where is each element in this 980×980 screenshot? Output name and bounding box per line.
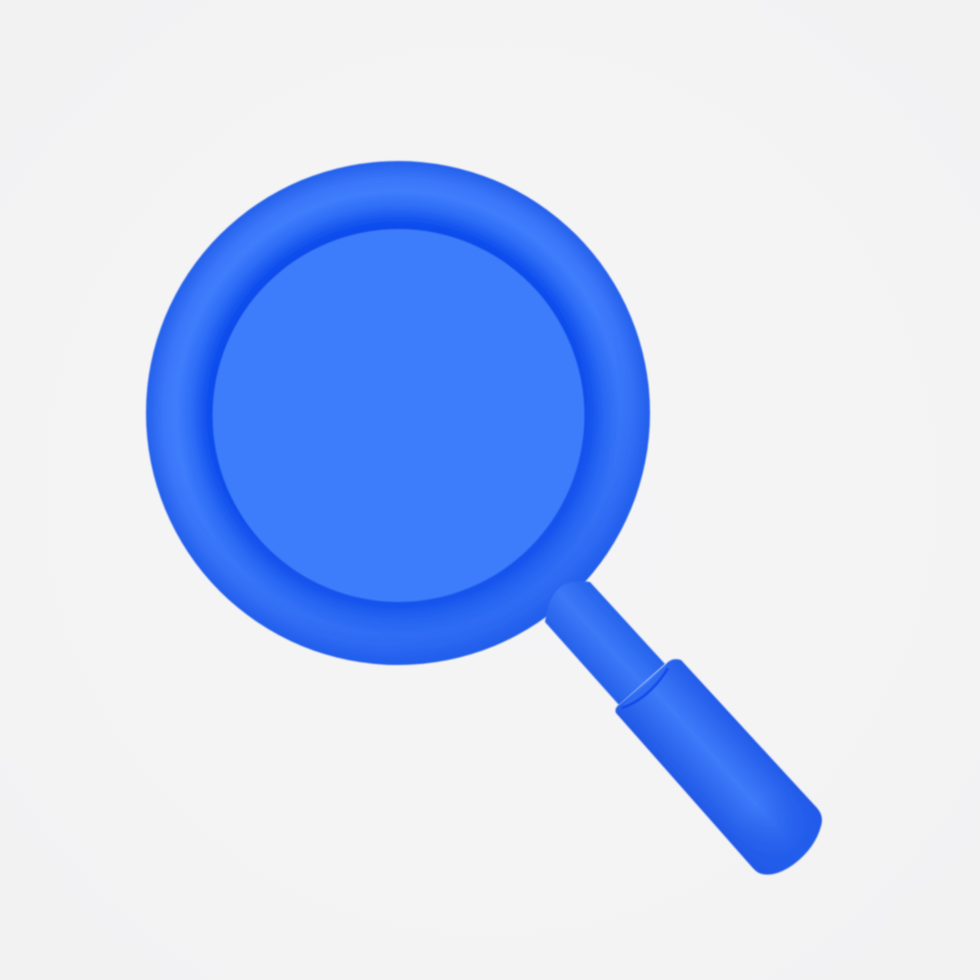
grip rim crease: [622, 668, 668, 708]
grip opening crescent: [622, 666, 667, 706]
lens face: [212, 229, 584, 602]
handle grip: [616, 659, 822, 875]
lens ring: [146, 161, 650, 665]
handle stem: [545, 581, 665, 705]
grip end shading: [616, 659, 822, 875]
